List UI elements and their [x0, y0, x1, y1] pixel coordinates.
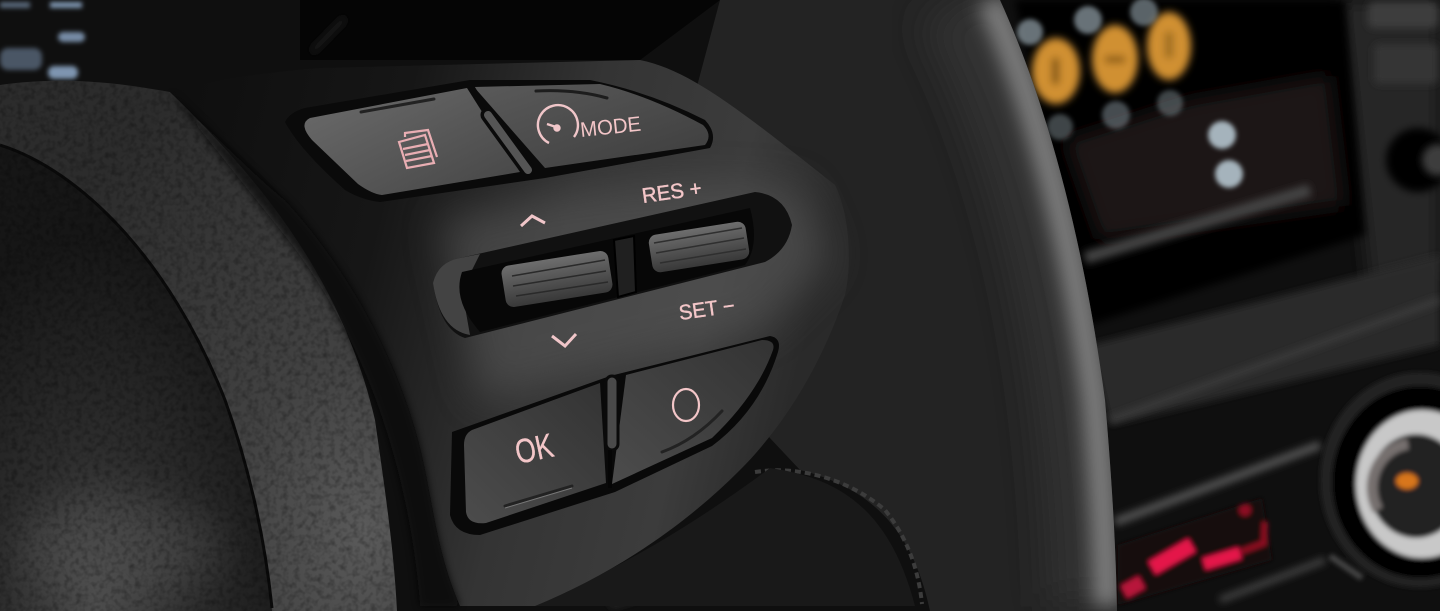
button: ok	[464, 383, 606, 523]
climate knob	[1320, 372, 1440, 588]
leather inner pad	[0, 145, 272, 611]
roller right	[648, 221, 750, 273]
set minus label: SET −	[677, 294, 736, 325]
icon: circle	[673, 389, 699, 421]
left wheel leather	[0, 81, 397, 611]
button: mode	[474, 84, 709, 168]
top button divider	[472, 85, 528, 170]
bottom button divider	[610, 382, 612, 488]
top button well	[285, 80, 713, 202]
roller left	[500, 250, 614, 308]
button: menu list	[304, 88, 520, 195]
instrument lights	[0, 2, 85, 79]
roller pivot	[614, 236, 636, 297]
icon: gauge	[538, 105, 578, 143]
control panel bezel	[170, 60, 849, 606]
vent control	[1368, 2, 1440, 192]
steering spoke leather	[698, 0, 1117, 611]
infotainment screen	[1015, 0, 1365, 325]
top dark trim	[300, 0, 720, 60]
screen dots	[1017, 0, 1243, 188]
up arrow	[521, 216, 545, 226]
down arrow	[552, 334, 576, 346]
roller recess	[433, 192, 792, 338]
screen digits	[1032, 12, 1191, 104]
lower shadow below spoke	[530, 468, 915, 606]
mode label: MODE	[579, 113, 642, 142]
ok label: OK	[512, 427, 557, 472]
button: circle	[612, 340, 774, 484]
red climate display	[1118, 498, 1272, 605]
bottom button well	[450, 336, 779, 535]
res plus label: RES +	[640, 177, 703, 208]
stitching	[755, 470, 922, 604]
icon: pages	[399, 130, 437, 168]
